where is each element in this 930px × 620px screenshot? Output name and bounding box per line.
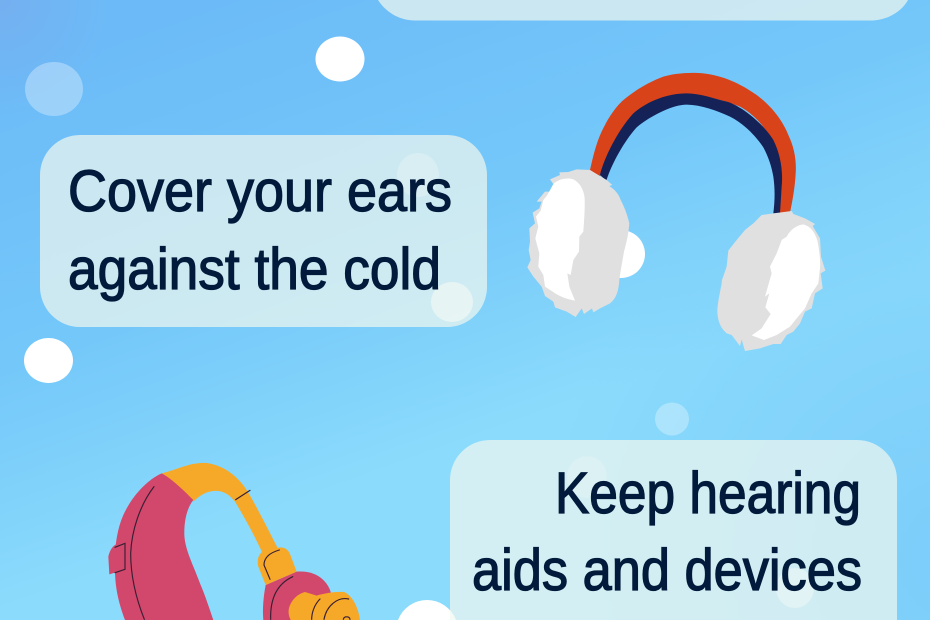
text: cover your ears — [68, 159, 452, 302]
icon: earmuffs — [527, 73, 825, 351]
text: keep hearing aids: aids and devices — [472, 538, 862, 603]
panel: top tip (cropped) — [378, 0, 908, 20]
text: cover your ears: Cover your ears — [68, 159, 452, 224]
text: keep hearing aids: Keep hearing — [555, 461, 861, 526]
icon: hearing aid — [108, 463, 360, 620]
panel: keep hearing aids — [450, 440, 897, 620]
text: cover your ears: against the cold — [68, 237, 441, 302]
snow bubbles — [24, 36, 814, 620]
panel: cover your ears — [40, 135, 487, 327]
text: keep hearing aids — [472, 461, 862, 603]
